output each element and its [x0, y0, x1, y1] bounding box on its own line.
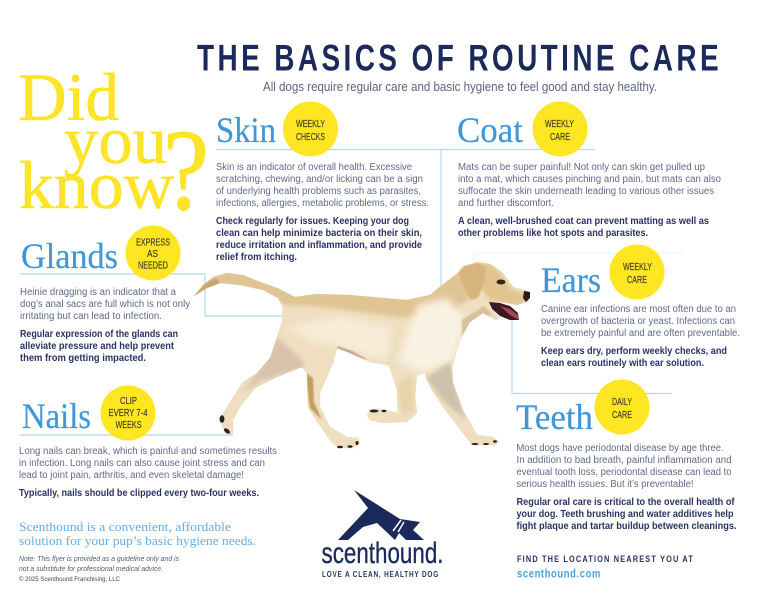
heading: did you know: know [19, 147, 174, 223]
disclaimer note [19, 554, 179, 573]
panel: nails: Long nails can break, which is painful and sometimes results [19, 446, 277, 457]
panel: teeth: fight plaque and tartar buildup between cleanings. [516, 521, 737, 532]
panel: nails: in infection. Long nails can also cause joint stress and can [19, 458, 265, 469]
panel: ears: Ears [541, 260, 601, 300]
tagline: scenthound solution: solution for your pup’s basic hygiene needs. [19, 533, 256, 548]
panel: skin: WEEKLY [296, 119, 325, 130]
panel: teeth: DAILY [612, 397, 632, 408]
heading: did you know [18, 59, 209, 235]
panel: teeth: CARE [612, 410, 632, 421]
panel: skin: relief from itching. [216, 252, 297, 263]
panel: ears [474, 244, 740, 394]
panel: skin: infections, allergies, metabolic problems, or stress. [216, 198, 429, 209]
panel: nails: WEEKS [116, 420, 142, 431]
panel: nails [19, 386, 277, 499]
dog nose [523, 291, 530, 302]
heading: did you know: Did [18, 59, 119, 135]
panel: ears: overgrowth of bacteria or yeast. Infections can [541, 316, 735, 327]
panel: coat: Mats can be super painful! Not only can skin get pulled up [458, 162, 705, 173]
panel: glands: them from getting impacted. [20, 353, 146, 364]
panel: skin [216, 102, 595, 290]
panel: nails: Nails [22, 396, 91, 436]
panel: teeth: Regular oral care is critical to the overall health of [516, 497, 735, 508]
dog photo illustration [190, 262, 530, 448]
panel: skin: clean can help minimize bacteria on their skin, [216, 228, 422, 239]
panel: ears: clean ears routinely with ear solution. [541, 358, 704, 369]
panel: coat: and further discomfort. [458, 198, 554, 209]
tagline: scenthound solution [19, 519, 256, 548]
panel: teeth: your dog. Teeth brushing and water additives help [516, 509, 734, 520]
panel: skin: reduce irritation and inflammation, and provide [216, 240, 423, 251]
panel: skin: scratching, chewing, and/or licking can be a sign [216, 174, 423, 185]
heading: did you know: you [64, 102, 167, 178]
panel: coat [457, 102, 721, 239]
panel: ears: CARE [627, 275, 647, 286]
panel: teeth: eventual tooth loss, periodontal disease can lead to [516, 467, 732, 478]
dog eye [496, 280, 506, 284]
panel: glands: dog’s anal sacs are full which is not only [20, 299, 190, 310]
heading: did you know: ? [163, 107, 209, 235]
panel: ears: WEEKLY [623, 262, 652, 273]
panel: skin: Skin [216, 110, 276, 150]
panel: skin: Check regularly for issues. Keeping your dog [216, 216, 409, 227]
panel: glands: Glands [21, 236, 118, 276]
panel: teeth: serious health issues. But it’s preventable! [516, 479, 694, 490]
panel: ears: Keep ears dry, perform weekly checks, and [541, 346, 727, 357]
copyright: © 2025 Scenthound Franchising, LLC [19, 575, 120, 583]
panel: glands: Heinie dragging is an indicator that a [20, 287, 176, 298]
panel: teeth: In addition to bad breath, painful inflammation and [516, 455, 732, 466]
panel: glands [20, 226, 285, 364]
panel: glands: NEEDED [138, 260, 168, 272]
logo: scenthound: LOVE A CLEAN, HEALTHY DOG [322, 570, 439, 579]
panel: skin: of underlying health problems such as parasites, [216, 186, 421, 197]
panel: skin: Skin is an indicator of overall health. Excessive [216, 162, 412, 173]
panel: coat: other problems like hot spots and parasites. [458, 228, 648, 239]
panel: glands: irritating but can lead to infection. [20, 311, 162, 322]
panel: teeth: Teeth [516, 397, 593, 437]
panel: nails: EVERY 7-4 [108, 408, 148, 419]
disclaimer note: not a substitute for professional medical advice. [19, 564, 163, 573]
panel: coat: A clean, well-brushed coat can prevent matting as well as [458, 216, 710, 227]
dog ear [458, 263, 486, 300]
panel: coat: suffocate the skin underneath leading to various other issues [458, 186, 714, 197]
subtitle: All dogs require regular care and basic hygiene to feel good and stay healthy. [263, 80, 657, 94]
panel: nails: Typically, nails should be clipped every two-four weeks. [19, 488, 259, 499]
dog mouth and tongue [489, 302, 519, 320]
panel: nails: lead to joint pain, arthritis, and even skeletal damage! [19, 470, 244, 481]
panel: coat: into a mat, which causes pinching and pain, but mats can also [458, 174, 721, 185]
panel: glands: EXPRESS [136, 238, 170, 248]
panel: coat: Coat [457, 110, 523, 150]
panel: ears: Canine ear infections are most often due to an [541, 304, 736, 315]
panel: glands: AS [147, 249, 158, 260]
dog paws [220, 410, 497, 448]
panel: skin: CHECKS [296, 132, 325, 143]
call to action: FIND THE LOCATION NEAREST YOU AT [517, 554, 694, 565]
panel: teeth [516, 380, 737, 532]
panel: teeth: Most dogs have periodontal disease by age three. [516, 443, 724, 454]
panel: coat: WEEKLY [545, 119, 574, 130]
panel: glands: Regular expression of the glands can [20, 329, 178, 340]
tagline: scenthound solution: Scenthound is a convenient, affordable [19, 519, 231, 534]
logo: scenthound: scenthound. [322, 537, 444, 570]
call to action [517, 554, 694, 580]
disclaimer note: Note: This flyer is provided as a guideline only and is [19, 554, 179, 563]
panel: glands: alleviate pressure and help prevent [20, 341, 175, 352]
panel: ears: be extremely painful and are often preventable. [541, 328, 740, 339]
logo mark: dog silhouette [338, 490, 424, 540]
panel: nails: CLIP [120, 396, 137, 407]
panel: coat: CARE [550, 132, 570, 143]
call to action: scenthound.com [517, 566, 601, 580]
logo: scenthound [322, 490, 444, 579]
